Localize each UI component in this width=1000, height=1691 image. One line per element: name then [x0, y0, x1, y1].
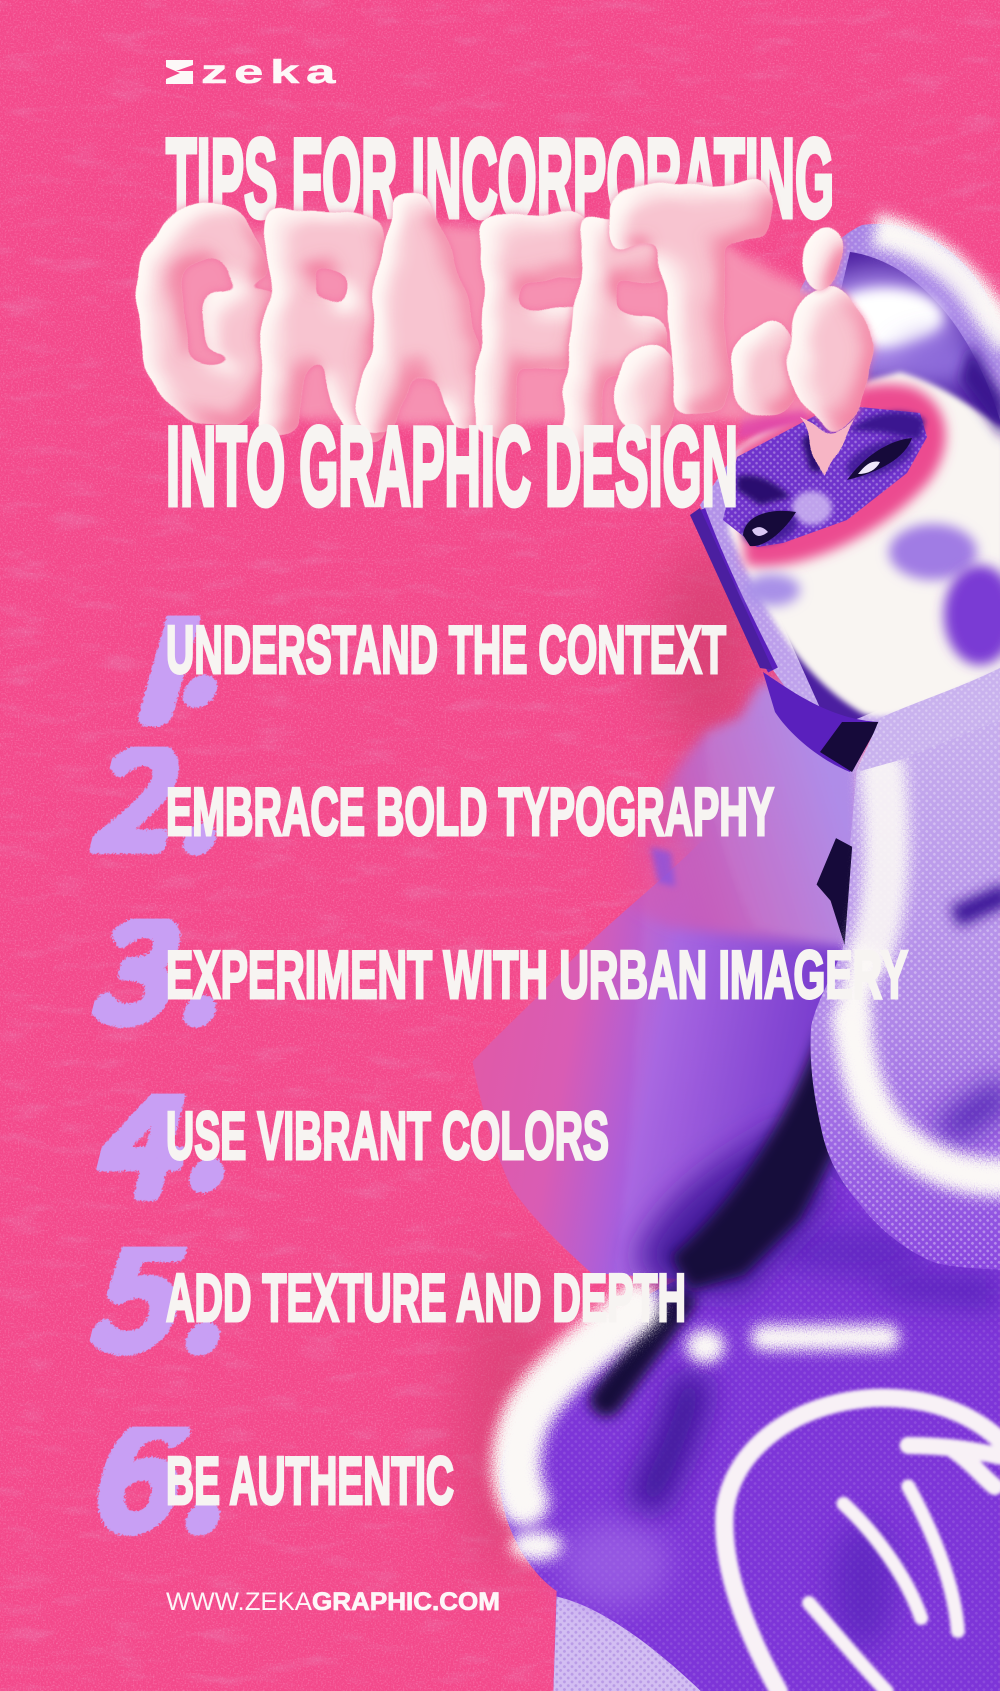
graffiti: bubble lobes of the last letters [729, 326, 805, 418]
numeral 6: 6. [77, 1360, 263, 1569]
graffiti lettering: G [137, 157, 279, 469]
graffiti lettering [137, 130, 873, 501]
graffiti lettering: F [469, 164, 588, 488]
numeral 2: 2. [80, 691, 255, 886]
footer website: GRAPHIC.COM [312, 1588, 500, 1616]
footer website: WWW.ZEKA [166, 1588, 312, 1616]
graffiti lettering: F [555, 165, 678, 501]
figure: right arm sleeve [811, 671, 1000, 1270]
figure: face [723, 270, 1000, 717]
numeral 1: 1 [77, 540, 262, 746]
figure: hood [700, 224, 1000, 750]
illustration: hooded figure in purple halftone [472, 224, 1000, 1691]
numeral 3: 3. [80, 863, 255, 1058]
tip 4: USE VIBRANT COLORS [166, 1098, 609, 1174]
graffiti drip [800, 414, 856, 474]
numeral 4: 4 [79, 1020, 217, 1237]
footer website [166, 1588, 500, 1616]
icon: left eye [743, 511, 796, 546]
logo: zeka: zeka [201, 54, 336, 90]
figure: black shadow between arms [636, 1025, 839, 1294]
graffiti lettering: R [255, 157, 397, 492]
graffiti lettering: A [348, 146, 491, 481]
figure: smiley face drawn on hoodie [724, 1398, 1000, 1691]
figure: sprayed white shoulder and nose dashes [510, 1307, 887, 1561]
figure: left sleeve and chest [472, 682, 863, 1284]
figure: collar [690, 508, 1000, 772]
figure: lower body (scaled coordinates) [472, 671, 1000, 1691]
icon: right eye [847, 438, 912, 480]
numeral 5: 5. [77, 1180, 263, 1389]
figure: torso [500, 1176, 1000, 1691]
numeral 4: . [173, 1010, 269, 1227]
tip 6: BE AUTHENTIC [166, 1443, 454, 1519]
graffiti lettering: T [611, 130, 777, 468]
numeral 1: . [174, 581, 250, 712]
